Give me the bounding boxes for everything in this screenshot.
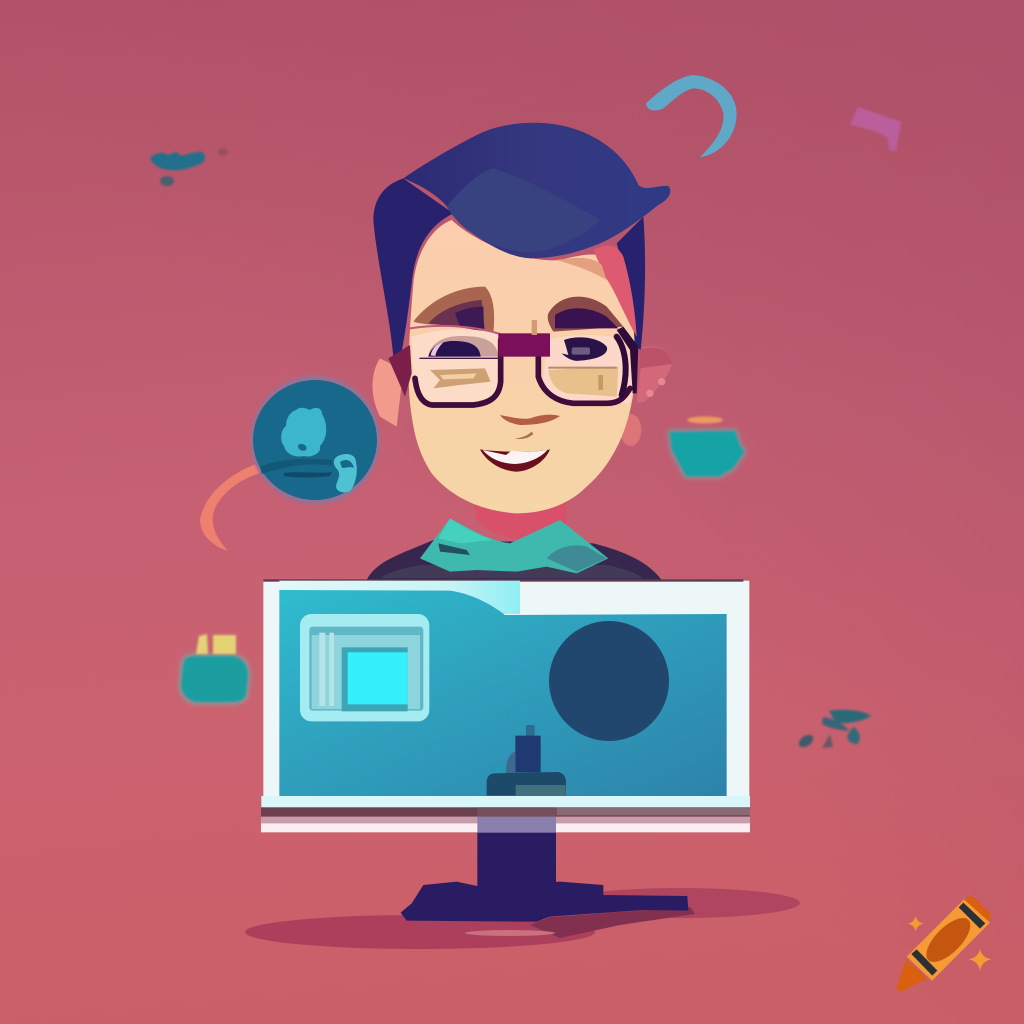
- icon: floating cloud blob top left: [150, 148, 228, 186]
- right lens: [543, 335, 632, 403]
- person: [367, 123, 672, 580]
- cheek blob: [620, 414, 641, 446]
- icon: dark leaf shapes right: [797, 710, 871, 750]
- hair tone on forehead: [593, 246, 637, 337]
- icon: pink note top right: [850, 107, 901, 151]
- bottle silhouette: [487, 725, 566, 796]
- stand neck: [477, 810, 556, 890]
- swoosh arc: [200, 462, 264, 551]
- icon: blue curved hook top: [646, 75, 737, 157]
- hair top and fringe: [403, 123, 670, 258]
- nose: [500, 415, 560, 425]
- icon: crayon logo: [897, 896, 991, 992]
- neck: [473, 500, 567, 539]
- glasses frame: [410, 326, 630, 405]
- window panel: [300, 614, 429, 721]
- icon: teal pot right: [670, 416, 744, 476]
- collar: [420, 518, 608, 573]
- screen: [279, 590, 727, 796]
- left ear: [372, 358, 403, 427]
- face: [409, 220, 635, 513]
- monitor: [261, 579, 750, 922]
- glasses bridge: [498, 333, 550, 357]
- eyebrows: [413, 287, 494, 333]
- icon: teal circle with figures: [200, 375, 380, 551]
- dark circle: [549, 621, 669, 741]
- hair back sides: [373, 178, 453, 363]
- smile: [480, 449, 550, 472]
- right ear: [637, 346, 672, 403]
- monitor frame: [263, 581, 749, 807]
- left lens: [412, 329, 500, 405]
- icon: teal pouch left: [181, 634, 248, 702]
- stand foot: [401, 882, 688, 922]
- shoulders: [367, 540, 662, 580]
- floor shadow: [245, 888, 800, 949]
- bezel bottom: [261, 796, 750, 807]
